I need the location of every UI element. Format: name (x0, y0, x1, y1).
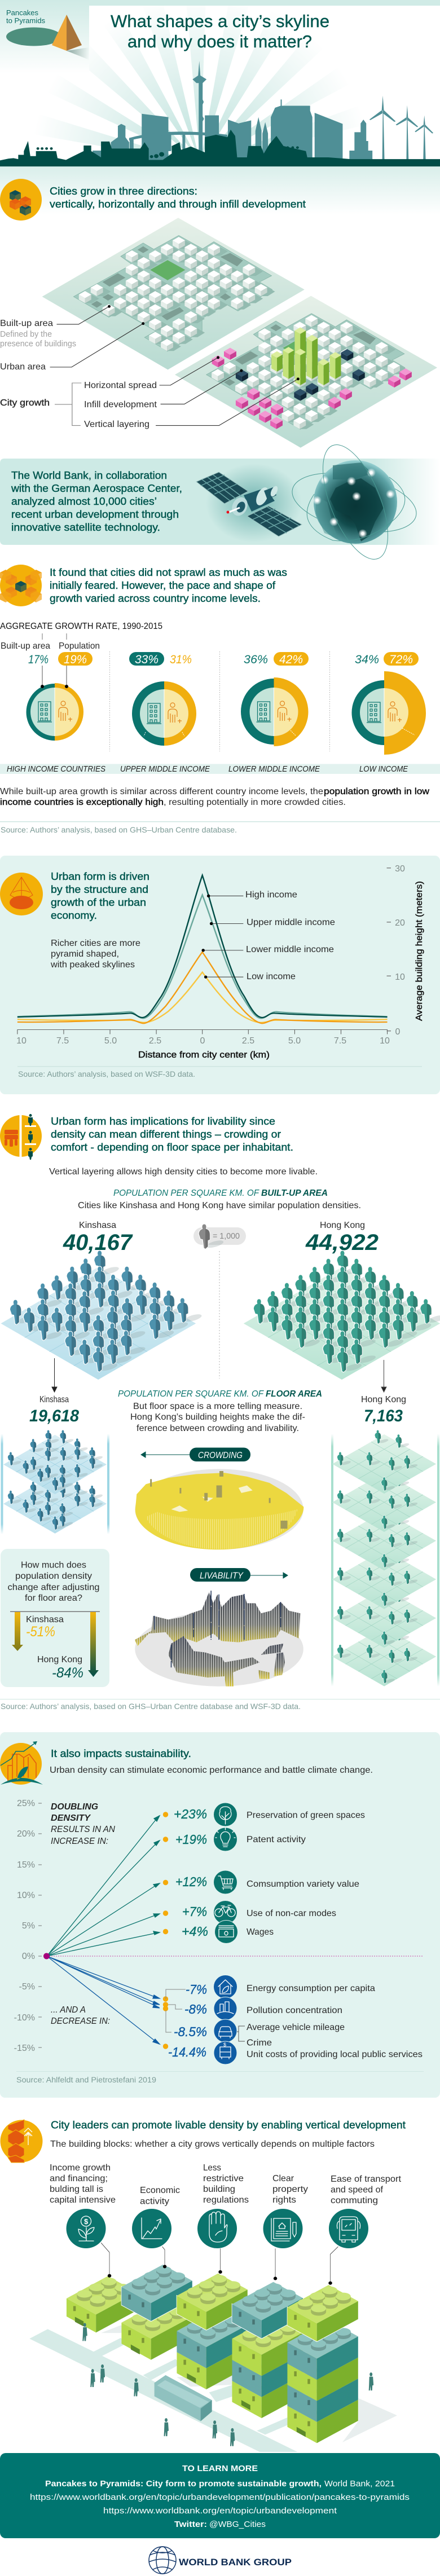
map: baseline city (42, 218, 305, 369)
lower middle income: 42% (279, 653, 303, 666)
panel: to learn more: World Bank, 2021 (324, 2480, 395, 2489)
high income countries: 19% (64, 653, 87, 666)
y axis labels: 10% (17, 1891, 35, 1900)
upper middle income (129, 652, 196, 746)
text: and a decrease (51, 2005, 110, 2026)
text: richer cities: with peaked skylines (50, 960, 135, 970)
y axis labels: 0% (22, 1952, 35, 1961)
layered floors: Kinshasa (1, 1430, 109, 1534)
series labels: Lower middle income (246, 945, 334, 954)
callout: density change: for floor area? (25, 1593, 82, 1603)
arrow: Hong Kong built-up to floor (381, 1360, 386, 1392)
y axis labels: 15% (17, 1860, 35, 1870)
factor: income growth: capital intensive (50, 2195, 116, 2205)
navy infill cubes (236, 349, 365, 401)
people grid: Kinshasa (1, 1250, 203, 1380)
text: population growth note: population growth in low (324, 787, 429, 796)
callout: density change: population density (15, 1571, 92, 1581)
label: Kinshasa floor area: 19,618 (29, 1407, 79, 1425)
street plan (29, 2329, 297, 2452)
low income (351, 652, 426, 755)
y axis labels: 20% (17, 1829, 35, 1839)
legend labels: Built-up area (1, 641, 50, 651)
labels: city growth diagram: Horizontal spread (84, 381, 157, 390)
header background rays (0, 0, 440, 164)
labels: city growth diagram: Defined by the (0, 329, 52, 339)
stack 4 (232, 2282, 303, 2418)
heading: livability: Urban form has implications for livability since (51, 1116, 275, 1127)
layered floors: Hong Kong (331, 1430, 439, 1686)
illustration: satellite (196, 464, 302, 543)
panel: to learn more: Pancakes to Pyramids: City form to promote sustainable growth, (45, 2480, 322, 2489)
factor: income growth (50, 2163, 116, 2205)
illustration: globe with orbits (287, 436, 422, 568)
values: increases (174, 1807, 208, 1939)
series labels: High income (245, 890, 297, 900)
chart: aggregate growth rate (0, 633, 440, 774)
text: doubling density: INCREASE IN: (51, 1837, 108, 1846)
icon: crowding vs comfort (0, 1113, 42, 1160)
factor: building regulations: building (203, 2185, 235, 2194)
labels: decreases: Pollution concentration (247, 2006, 342, 2015)
heading: sprawl finding: growth varied across country income levels. (50, 593, 261, 604)
text: floor space note: Hong Kong’s building heights make the dif- (130, 1412, 305, 1422)
chart title: AGGREGATE GROWTH RATE, 1990-2015 (0, 622, 162, 631)
factor: economic activity (140, 2186, 180, 2207)
text: and a decrease: ... AND A (51, 2005, 86, 2015)
series labels: Low income (247, 972, 296, 981)
chart: building height by distance (16, 864, 424, 1060)
income band labels: UPPER MIDDLE INCOME (120, 764, 210, 774)
series labels: Upper middle income (247, 918, 335, 927)
icon: car (214, 2019, 237, 2042)
bus (155, 2375, 212, 2421)
factor: building regulations (203, 2163, 249, 2205)
factor: income growth: bulding tall is (50, 2185, 103, 2194)
text: population growth note: , resulting potentially in more crowded cities. (164, 798, 346, 807)
diagram: city growth isometric maps (42, 218, 437, 448)
text: vertical layering: Vertical layering allows high density cities to become more livable. (49, 1167, 318, 1177)
legend labels: Population (59, 641, 100, 651)
icon: pancake disc and pyramid (6, 15, 89, 60)
labels: decreases: Unit costs of providing local public services (247, 2050, 423, 2059)
stack 3 (177, 2274, 248, 2389)
map: Hong Kong 3D density (135, 1591, 303, 1686)
pill: crowding (141, 1447, 250, 1461)
stack 5 (287, 2285, 358, 2443)
source note: Source: Ahlfeldt and Pietrostefani 2019 (16, 2075, 156, 2084)
text: similar densities: Cities like Kinshasa and Hong Kong have similar population densities. (78, 1201, 361, 1210)
icon: pyramid on disc (0, 873, 43, 915)
label: Hong Kong floor area: 7,163 (364, 1407, 403, 1425)
labels: city growth diagram: Vertical layering (84, 420, 149, 429)
lower middle income: 36% (244, 653, 268, 666)
heading: urban form: growth of the urban (51, 897, 146, 908)
panel: series badge Pancakes to Pyramids: to Pyramids (6, 16, 45, 25)
panel: Hong Kong headline (305, 1221, 379, 1255)
labels: city growth diagram: City growth (0, 398, 50, 408)
labels: increases (247, 1811, 365, 1937)
icon: building blocks (0, 179, 42, 221)
values: decreases: -8.5% (174, 2024, 207, 2039)
text: floor space note (130, 1402, 305, 1433)
leader lines (50, 306, 298, 425)
labels: decreases: Energy consumption per capita (247, 1984, 375, 1993)
low income: 34% (355, 653, 379, 666)
axis labels: 10 (395, 972, 405, 982)
callout: density change: How much does (21, 1560, 86, 1570)
values: increases: +12% (175, 1874, 207, 1889)
label: Kinshasa floor area (29, 1395, 79, 1425)
axis labels: 30 (395, 864, 405, 874)
axis labels: 20 (395, 918, 405, 928)
factor: property rights: property (272, 2185, 308, 2194)
labels: decreases (247, 1984, 423, 2059)
factor: property rights: rights (272, 2195, 296, 2205)
labels: city growth diagram (0, 319, 157, 429)
heading: livability: density can mean different things – crowding or (51, 1129, 281, 1140)
leader lines (101, 2243, 338, 2283)
panel: to learn more (0, 2453, 440, 2538)
leader dots (108, 305, 300, 380)
high income countries: 17% (28, 653, 49, 666)
arrow: Hong Kong change (88, 1612, 99, 1677)
icon: money plant: $ (84, 2217, 89, 2226)
icon: public transport (214, 2041, 237, 2064)
pedestrians (82, 2323, 373, 2446)
income band labels (0, 764, 440, 774)
title: and why does it matter? (127, 32, 312, 51)
values: decreases: -7% (186, 1982, 207, 1997)
logo: World Bank Group: WORLD BANK GROUP (179, 2557, 292, 2568)
panel: Kinshasa headline: Kinshasa (79, 1221, 116, 1230)
arrow: Kinshasa built-up to floor (52, 1358, 57, 1392)
panel: urban form chart (0, 856, 440, 1094)
legend labels (1, 633, 100, 651)
heading: sprawl finding (50, 567, 287, 604)
labels: city growth diagram: Infill development (84, 400, 157, 409)
panel text: The World Bank, in collaboration (11, 470, 167, 481)
label: Kinshasa floor area: Kinshasa (39, 1395, 69, 1404)
axis labels: 10 (16, 1036, 27, 1046)
arrows: decreases (47, 1956, 160, 2044)
stack 1 (67, 2276, 137, 2332)
y axis labels: -15% (14, 2044, 35, 2053)
income band labels: HIGH INCOME COUNTRIES (7, 764, 105, 774)
icon: stacked bricks (0, 2120, 43, 2163)
logo: World Bank Group (149, 2547, 292, 2574)
axis labels: 2.5 (149, 1036, 161, 1046)
factor: building regulations: restrictive (203, 2174, 244, 2183)
factor: property rights: Clear (272, 2174, 294, 2183)
doors (75, 2317, 306, 2437)
high income countries (26, 652, 93, 741)
callout: density change: Kinshasa (26, 1615, 64, 1624)
origin marker (43, 1953, 50, 1959)
legend: one figure equals 1,000: = 1,000 (213, 1231, 240, 1241)
title: What shapes a city’s skyline (111, 11, 329, 31)
result markers (163, 1812, 168, 2049)
panel: satellite collaboration (0, 436, 440, 568)
title (111, 11, 329, 51)
y axis labels: 5% (22, 1921, 35, 1931)
icon: public transport: $ (223, 2042, 226, 2047)
factor: property rights (272, 2174, 308, 2205)
pill: livability: LIVABILITY (200, 1571, 244, 1580)
factor: transport: commuting (331, 2196, 378, 2205)
icon: banknote (214, 1920, 238, 1944)
icon: tree (214, 1803, 237, 1826)
labels: increases: Preservation of green spaces (247, 1811, 365, 1820)
callout: density change: -51% (26, 1624, 55, 1640)
series labels (245, 890, 335, 981)
people grid: Hong Kong (244, 1250, 440, 1380)
city skyline illustration (0, 61, 440, 167)
heading: urban form: Urban form is driven (51, 871, 149, 882)
values: increases: +23% (174, 1807, 207, 1821)
heading: cities grow (50, 186, 306, 210)
panel: to learn more: https://www.worldbank.org/en/topic/urbandevelopment/publication/pancakes-to-pyramids (30, 2493, 410, 2502)
heading: livability: comfort - depending on floor space per inhabitant. (51, 1142, 293, 1153)
panel text: recent urban development through (11, 509, 179, 520)
upper middle income: 31% (170, 653, 192, 666)
stack 2 (121, 2265, 192, 2360)
factor: transport (331, 2174, 402, 2205)
values: decreases: -14.4% (168, 2045, 206, 2059)
axis labels: 7.5 (56, 1036, 69, 1046)
arrow: Kinshasa change (12, 1612, 23, 1651)
text: richer cities: Richer cities are more (51, 939, 140, 948)
panel text: analyzed almost 10,000 cities’ (11, 496, 157, 507)
y axis labels: -10% (14, 2013, 35, 2023)
icon: eco house (214, 1975, 237, 1998)
axis labels: 2.5 (242, 1036, 254, 1046)
factor: income growth: Income growth (50, 2163, 111, 2173)
badge title: Pancakes (6, 8, 38, 17)
pill: crowding: CROWDING (198, 1451, 243, 1460)
text: doubling density: RESULTS IN AN (51, 1825, 115, 1834)
arrows: increases (47, 1816, 160, 1956)
axis labels: 10 (380, 1036, 390, 1046)
text: richer cities: pyramid shaped, (51, 949, 119, 959)
factor: income growth: and financing; (50, 2174, 108, 2183)
heading: urban form: economy. (51, 910, 97, 921)
icon: money plant (67, 2209, 106, 2248)
labels: decreases: Crime (247, 2038, 272, 2047)
values: decreases: -8% (184, 2002, 207, 2016)
leader dots (108, 2265, 332, 2285)
icon: shopping cart (214, 1870, 237, 1894)
panel: to learn more: Twitter: (174, 2520, 207, 2529)
text: richer cities (50, 939, 140, 970)
panel: Hong Kong headline: Hong Kong (320, 1221, 365, 1230)
labels: city growth diagram: presence of buildings (0, 339, 76, 349)
y axis labels (14, 1799, 42, 2053)
ground shadows (101, 2325, 397, 2442)
heading: population per sq km built-up area: BUILT-UP AREA (261, 1188, 328, 1198)
source note: Source: Authors’ analysis, based on GHS–Urban Centre database. (1, 825, 237, 834)
heading: population per sq km built-up area: POPULATION PER SQUARE KM. OF (113, 1188, 259, 1198)
icon: rising chart (132, 2209, 171, 2248)
labels: increases: Comsumption variety value (247, 1879, 359, 1889)
factor: transport: Ease of transport (331, 2174, 402, 2184)
isometric people grids (1, 1250, 440, 1380)
heading: cities grow: Cities grow in three directions: (50, 186, 197, 197)
heading: urban form (51, 871, 149, 921)
panel text (11, 470, 182, 533)
map: grown city (175, 296, 437, 448)
factor: building regulations: regulations (203, 2195, 249, 2205)
illustration: building block stacks (29, 2243, 397, 2452)
income band labels: LOW INCOME (359, 764, 408, 774)
low income: 72% (389, 653, 413, 666)
y axis labels: -5% (19, 1982, 35, 1992)
callout: density change: -84% (52, 1665, 83, 1681)
panel: to learn more: @WBG_Cities (209, 2520, 266, 2529)
factor: building regulations: Less (203, 2163, 221, 2173)
axis labels: 5.0 (104, 1036, 117, 1046)
icon: green growth (0, 1741, 43, 1785)
icon: sprawl cross (0, 565, 42, 606)
factor: transport: and speed of (331, 2185, 384, 2195)
factor: economic activity: activity (140, 2196, 169, 2207)
heading: floor area: POPULATION PER SQUARE KM. OF (118, 1389, 264, 1399)
y axis labels: 25% (17, 1799, 35, 1808)
label: Hong Kong floor area: Hong Kong (361, 1395, 406, 1404)
panel text: with the German Aerospace Center, (11, 483, 182, 494)
heading: city leaders: City leaders can promote livable density by enabling vertical development (51, 2120, 406, 2131)
legend: one figure equals 1,000 (193, 1224, 246, 1249)
callout: density change: Hong Kong (37, 1655, 82, 1665)
labels: increases: Patent activity (247, 1835, 306, 1844)
values: increases: +4% (182, 1924, 208, 1939)
text: population growth note: income countries is exceptionally high (0, 798, 164, 807)
section intro gradient band (0, 166, 440, 214)
text: building blocks: The building blocks: whether a city grows vertically depends on multiple factors (50, 2139, 375, 2149)
panel: Hong Kong headline: 44,922 (305, 1230, 379, 1255)
values: increases: +19% (175, 1832, 207, 1847)
labels: decreases: Average vehicle mileage (247, 2023, 345, 2032)
label: Hong Kong floor area (361, 1395, 406, 1425)
panel: Kinshasa headline: 40,167 (63, 1230, 133, 1255)
heading: sprawl finding: initially feared. However, the pace and shape of (50, 580, 276, 591)
icon: raised hand (197, 2209, 237, 2248)
text: density stimulates: Urban density can stimulate economic performance and battle climate change. (50, 1765, 373, 1775)
pink horizontal spread cubes (212, 347, 412, 429)
panel: to learn more: https://www.worldbank.org/en/topic/urbandevelopment (103, 2507, 337, 2516)
factor: economic activity: Economic (140, 2186, 180, 2195)
text: doubling density (51, 1802, 115, 1846)
panel: series badge Pancakes to Pyramids (0, 0, 89, 73)
text: population growth note (0, 787, 429, 807)
chart: building height by distance: Average building height (meters) (415, 881, 424, 1021)
callout: density change: change after adjusting (8, 1583, 99, 1592)
values: increases: +7% (182, 1904, 207, 1919)
lower middle income (241, 652, 309, 746)
upper middle income: 33% (135, 653, 159, 666)
text: doubling density: DENSITY (51, 1813, 91, 1823)
separators (109, 651, 329, 751)
icon: bus front (329, 2209, 368, 2248)
panel: to learn more: TO LEARN MORE (182, 2464, 258, 2473)
text: floor space note: ference between crowding and livability. (137, 1424, 299, 1433)
text: population growth note: While built-up area growth is similar across different country income levels, the (0, 787, 323, 796)
text: floor space note: But floor space is a more telling measure. (133, 1402, 302, 1411)
callout: density change (1, 1549, 109, 1687)
labels: city growth diagram: Built-up area (0, 319, 53, 328)
labels: increases: Wages (247, 1927, 274, 1937)
axis labels (16, 864, 405, 1046)
values: decreases (168, 1982, 207, 2059)
heading: cities grow: vertically, horizontally and through infill development (50, 199, 306, 210)
icon: property document (263, 2209, 302, 2248)
icon: light bulb (214, 1828, 237, 1851)
pill: livability (190, 1568, 288, 1582)
icon: bicycle (214, 1901, 237, 1924)
source note: Source: Authors’ analysis, based on GHS–Urban Centre database and WSF-3D data. (1, 1702, 301, 1711)
chart: building height by distance: Distance from city center (km) (138, 1050, 270, 1060)
panel: sustainability (0, 1732, 440, 2098)
green vertical towers (271, 327, 341, 385)
heading: sprawl finding: It found that cities did not sprawl as much as was (50, 567, 287, 578)
axis labels: 0 (200, 1036, 205, 1046)
income band labels: LOWER MIDDLE INCOME (228, 764, 320, 774)
labels: city growth diagram: Urban area (0, 362, 46, 372)
heading: sustainability: It also impacts sustainability. (51, 1748, 191, 1759)
heading: urban form: by the structure and (51, 884, 148, 895)
text: doubling density: DOUBLING (51, 1802, 98, 1812)
text: and a decrease: DECREASE IN: (51, 2016, 110, 2026)
panel text: innovative satellite technology. (11, 522, 160, 533)
axis labels: 7.5 (334, 1036, 346, 1046)
heading: livability (51, 1116, 293, 1153)
axis labels: 5.0 (288, 1036, 301, 1046)
axis labels: 0 (395, 1027, 401, 1037)
heading: floor area: FLOOR AREA (266, 1389, 322, 1399)
labels: increases: Use of non-car modes (247, 1909, 336, 1918)
source note: Source: Authors’ analysis, based on WSF-3D data. (18, 1069, 195, 1078)
icon: city pollution (214, 1997, 237, 2020)
map: Kinshasa 3D density (135, 1469, 303, 1549)
